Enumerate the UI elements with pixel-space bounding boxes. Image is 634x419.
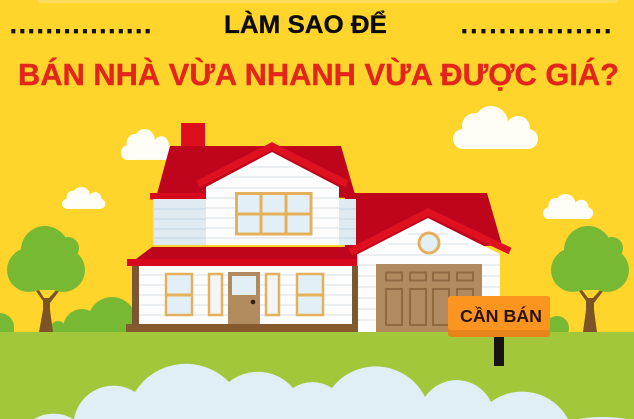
title: first line: LÀM SAO ĐỂ — [224, 10, 387, 39]
tree: left — [7, 226, 85, 332]
upper window — [236, 193, 311, 234]
upper gable wall — [206, 152, 339, 245]
sign post — [494, 336, 504, 366]
round window — [419, 233, 439, 253]
cloud: large foreground — [34, 364, 627, 419]
side wall: upper right — [339, 199, 356, 245]
sign board — [448, 296, 550, 337]
title: main headline: BÁN NHÀ VỪA NHANH VỪA ĐƯỢC GIÁ? — [18, 56, 619, 92]
tree: right — [551, 226, 629, 332]
porch base — [126, 324, 359, 332]
side wall: upper left — [154, 199, 206, 245]
for-sale sign — [448, 296, 550, 366]
title: dotted line right: ................ — [461, 12, 611, 39]
lower window right — [297, 274, 323, 315]
slim window left — [209, 274, 222, 315]
cloud: top right — [453, 106, 538, 149]
bush: right — [545, 316, 569, 340]
cloud: left — [62, 187, 105, 209]
garage roof — [345, 193, 502, 254]
garage wall — [358, 218, 500, 332]
house — [126, 123, 510, 332]
ground: grass — [0, 332, 634, 419]
slim window right — [266, 274, 279, 315]
upper gable trim — [198, 146, 347, 184]
chimney — [181, 123, 205, 149]
cloud: behind house — [121, 129, 174, 160]
garage door — [376, 264, 482, 332]
door — [228, 272, 260, 324]
sign label: CẦN BÁN — [460, 305, 542, 326]
title: dotted line left: ................ — [10, 12, 151, 39]
lower wall — [139, 266, 353, 324]
lower window left — [166, 274, 192, 315]
cloud: right — [543, 194, 593, 219]
main upper roof — [157, 146, 356, 198]
eave: upper left — [150, 193, 206, 200]
garage gable trim — [350, 212, 510, 252]
lower roof — [127, 247, 357, 266]
porch posts — [132, 266, 358, 324]
bushes: left — [0, 297, 136, 347]
